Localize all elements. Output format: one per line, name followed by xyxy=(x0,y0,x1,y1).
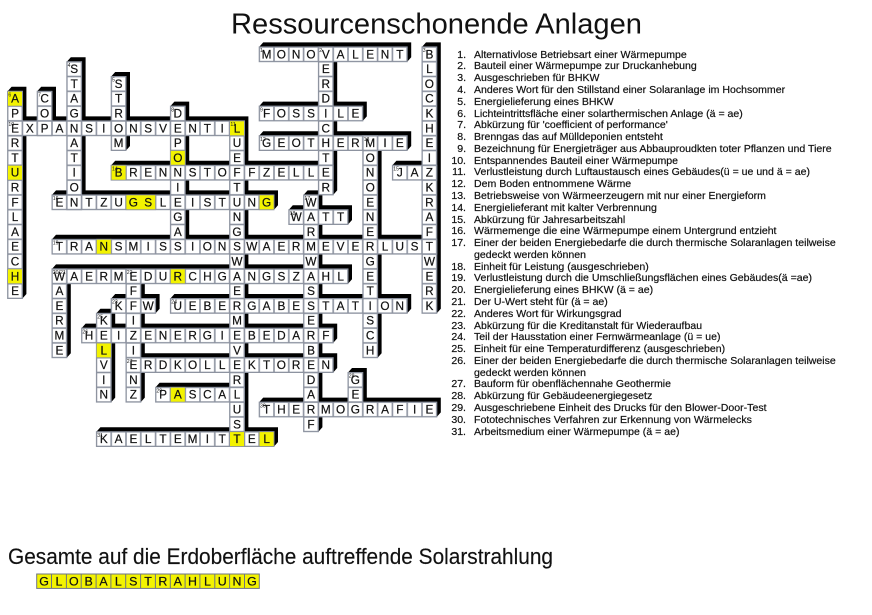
text: 11. xyxy=(452,166,466,178)
clue list: Der U-Wert steht für (ä = ae) xyxy=(474,296,608,308)
crossword 3D black extrusion xyxy=(8,42,441,447)
solution word: GLOBALSTRAHLUNG: GLOBALSTRAHLUNG xyxy=(39,574,257,588)
clue list: Energielieferant mit kalter Verbrennung xyxy=(474,202,657,214)
text: 4. xyxy=(457,84,466,96)
text: 25. xyxy=(451,343,466,355)
word 16: ENTZUGSLEISTUNG: ENTZUGSLEISTUNG xyxy=(55,195,271,209)
word 21: WAERMEDURCHGANGSZAHL: WAERMEDURCHGANGSZAHL xyxy=(54,269,344,283)
text: 14. xyxy=(451,202,466,214)
text: 27. xyxy=(451,378,466,390)
word 26: HEIZENERGIEBEDARF: HEIZENERGIEBEDARF xyxy=(85,328,329,342)
crossword clue numbers: 9 xyxy=(260,107,263,113)
word 20: WAERME: WAERME xyxy=(54,269,66,357)
clue list: Brenngas das auf Mülldeponien entsteht xyxy=(474,131,663,143)
text: 31. xyxy=(451,426,466,438)
crossword clue numbers: 22 xyxy=(127,270,133,276)
word 28: GEG: GEG xyxy=(351,373,360,416)
word 6: APERTURFLAECHE xyxy=(8,91,22,298)
word 8: DEPONIEGAS xyxy=(170,106,185,254)
word 4: STAGNATION: STAGNATION xyxy=(70,62,79,209)
text: 21. xyxy=(451,296,466,308)
text: 22. xyxy=(451,308,466,320)
word 17: WARMWASSERBEDARF: WARMWASSERBEDARF xyxy=(305,195,317,431)
word 13: MONOENERGETISCH: MONOENERGETISCH xyxy=(365,136,375,357)
word 2: VERDICHTER xyxy=(318,47,333,195)
word 6: APERTURFLAECHE: APERTURFLAECHE xyxy=(11,92,20,298)
crossword clue numbers: 28 xyxy=(349,374,355,380)
word 30: THERMOGRAFIE: THERMOGRAFIE xyxy=(263,402,433,416)
clue list: Bezeichnung für Energieträger aus Abbauproudkten toter Pflanzen und Tiere xyxy=(474,143,832,155)
text: 24. xyxy=(451,331,466,343)
text: 20. xyxy=(451,284,466,296)
text: 23. xyxy=(451,320,466,332)
text: 8. xyxy=(457,131,466,143)
crossword clue numbers: 13 xyxy=(364,137,369,143)
word 9: FOSSILE: FOSSILE xyxy=(263,106,359,120)
text: 10. xyxy=(451,155,466,167)
clue list: Entspannendes Bauteil einer Wärmepumpe xyxy=(474,155,678,167)
crossword clue numbers: 1 xyxy=(260,48,263,54)
text: 26. xyxy=(451,355,466,367)
crossword clue numbers: 10 xyxy=(8,122,14,128)
word 13: MONOENERGETISCH xyxy=(363,136,378,358)
word 3: BLOCKHEIZKRAFTWERK: BLOCKHEIZKRAFTWERK xyxy=(424,47,436,313)
crossword clue numbers: 15 xyxy=(393,166,399,172)
solution heading: Gesamte auf die Erdoberfläche auftreffende Solarstrahlung xyxy=(8,544,553,569)
crossword clue numbers: 7 xyxy=(38,92,41,98)
word 29: PASCAL: PASCAL xyxy=(159,388,241,402)
title: Ressourcenschonende Anlagen xyxy=(231,8,642,40)
text: 5. xyxy=(457,96,466,108)
crossword clue numbers: 30 xyxy=(260,403,266,409)
word 14: BRENNSTOFFZELLE: BRENNSTOFFZELLE xyxy=(115,166,330,180)
clue list: Teil der Hausstation einer Fernwärmeanlage (ü = ue) xyxy=(474,331,721,343)
word 7: COP xyxy=(37,91,52,136)
clue list: Energielieferung eines BHKW xyxy=(474,96,614,108)
text: 2. xyxy=(457,60,466,72)
word 5: STROM xyxy=(111,76,126,150)
text: 18. xyxy=(451,261,466,273)
word 27: ERDKOLLEKTOREN: ERDKOLLEKTOREN xyxy=(129,358,330,372)
clue list: Wärmemenge die eine Wärmepumpe einem Untergrund entzieht xyxy=(474,225,776,237)
clue list: Abkürzung für Jahresarbeitszahl xyxy=(474,214,625,226)
word 25: KELVIN xyxy=(96,313,111,402)
crossword clue numbers: 11 xyxy=(230,122,236,128)
crossword clue numbers: 19 xyxy=(53,240,59,246)
text: 15. xyxy=(451,214,466,226)
word 25: KELVIN: KELVIN xyxy=(100,314,108,402)
word 28: GEG xyxy=(348,372,363,417)
crossword clue numbers: 17 xyxy=(304,196,310,202)
crossword clue numbers: 27 xyxy=(127,359,133,365)
clue list: Abkürzung für 'coefficient of performance' xyxy=(474,119,668,131)
clue list: Arbeitsmedium einer Wärmepumpe (ä = ae) xyxy=(474,426,679,438)
clue list: Betriebsweise von Wärmeerzeugern mit nur einer Energieform xyxy=(474,190,766,202)
text: 19. xyxy=(451,272,466,284)
clue list: Anderes Wort für den Stillstand einer Solaranlage im Hochsommer xyxy=(474,84,785,96)
clue list: Dem Boden entnommene Wärme xyxy=(474,178,631,190)
text: 16. xyxy=(451,225,466,237)
text: 6. xyxy=(457,108,466,120)
clue list: Alternativlose Betriebsart einer Wärmepumpe xyxy=(474,49,687,61)
word 10: EXPANSIONSVENTIL: EXPANSIONSVENTIL xyxy=(11,121,241,135)
text: 3. xyxy=(457,72,466,84)
clue list: Bauform für obenflächennahe Geothermie xyxy=(474,378,671,390)
word 19: TRANSMISSIONSWAERMEVERLUST: TRANSMISSIONSWAERMEVERLUST xyxy=(56,240,433,254)
clue list xyxy=(451,49,836,438)
word 7: COP: COP xyxy=(40,92,49,135)
clue list: Fototechnisches Verfahren zur Erkennung von Wärmelecks xyxy=(474,414,752,426)
word 24: UEBERGABESTATION: UEBERGABESTATION xyxy=(174,299,404,313)
crossword clue numbers: 2 xyxy=(319,48,322,54)
clue list: Abkürzung für die Kreditanstalt für Wiederaufbau xyxy=(474,320,702,332)
text: 29. xyxy=(451,402,466,414)
crossword clue numbers xyxy=(8,48,426,439)
clue list: Anderes Wort für Wirkungsgrad xyxy=(474,308,622,320)
crossword clue numbers: 14 xyxy=(112,166,118,172)
crossword clue numbers: 4 xyxy=(68,63,71,69)
text: 12. xyxy=(451,178,466,190)
crossword clue numbers: 24 xyxy=(171,300,177,306)
text: 13. xyxy=(451,190,466,202)
crossword clue numbers: 25 xyxy=(97,314,103,320)
word 22: EFFIZIENZ: EFFIZIENZ xyxy=(129,269,138,402)
clue list: Einer der beiden Energiebedarfe die durch thermische Solaranlagen teilweise xyxy=(474,355,836,367)
clue list: Energielieferung eines BHKW (ä = ae) xyxy=(474,284,653,296)
clue list: Verlustleistung durch Luftaustausch eines Gebäudes(ü = ue und ä = ae) xyxy=(474,166,810,178)
clue list: Einer der beiden Energiebedarfe die durch thermische Solaranlagen teilweise xyxy=(474,237,836,249)
text: 30. xyxy=(451,414,466,426)
crossword clue numbers: 29 xyxy=(156,388,162,394)
crossword clue numbers: 31 xyxy=(97,433,103,439)
word 31: KAELTEMITTEL: KAELTEMITTEL xyxy=(100,432,270,446)
text: 1. xyxy=(457,49,466,61)
word 1: MONOVALENT: MONOVALENT xyxy=(262,47,403,61)
clue list: Einheit für eine Temperaturdifferenz (ausgeschrieben) xyxy=(474,343,725,355)
crossword clue numbers: 23 xyxy=(112,300,118,306)
crossword clue numbers: 3 xyxy=(423,48,426,54)
word 23: KFW: KFW xyxy=(115,299,155,313)
word 11: LUEFTUNGSWAERMEVERLUST: LUEFTUNGSWAERMEVERLUST xyxy=(231,121,243,446)
text: 17. xyxy=(451,237,466,249)
crossword clue numbers: 8 xyxy=(171,107,174,113)
clue list: Ausgeschriebene Einheit des Drucks für den Blower-Door-Test xyxy=(474,402,767,414)
text: 7. xyxy=(457,119,466,131)
clue list: Ausgeschrieben für BHKW xyxy=(474,72,599,84)
clue list: Bauteil einer Wärmepumpe zur Druckanhebung xyxy=(474,60,697,72)
crossword clue numbers: 5 xyxy=(112,78,115,84)
word 4: STAGNATION xyxy=(67,62,82,210)
word 5: STROM: STROM xyxy=(114,77,124,150)
word 2: VERDICHTER: VERDICHTER xyxy=(322,47,331,194)
clue list: Einheit für Leistung (ausgeschrieben) xyxy=(474,261,649,273)
crossword clue numbers: 16 xyxy=(53,196,59,202)
clue list: Verlustleistung durch die Umschließungsflächen eines Gebäudes(ä =ae) xyxy=(474,272,812,284)
word 22: EFFIZIENZ xyxy=(126,269,141,402)
word 18: WATT: WATT xyxy=(291,210,344,224)
word 8: DEPONIEGAS: DEPONIEGAS xyxy=(173,106,182,254)
word 12: GEOTHERMIE: GEOTHERMIE xyxy=(262,136,404,150)
clue list: gedeckt werden können xyxy=(474,367,586,379)
text: 9. xyxy=(457,143,466,155)
crossword clue numbers: 20/21 xyxy=(53,270,66,276)
word 15: JAZ: JAZ xyxy=(397,166,433,180)
crossword clue numbers: 12 xyxy=(260,137,266,143)
crossword clue numbers: 6 xyxy=(8,92,11,98)
crossword clue numbers: 26 xyxy=(82,329,88,335)
clue list: gedeckt werden können xyxy=(474,249,586,261)
clue list: Abkürzung für Gebäudeenergiegesetz xyxy=(474,390,652,402)
crossword clue numbers: 18 xyxy=(290,211,295,217)
clue list: Lichteintrittsfläche einer solarthermischen Anlage (ä = ae) xyxy=(474,108,743,120)
text: 28. xyxy=(451,390,466,402)
